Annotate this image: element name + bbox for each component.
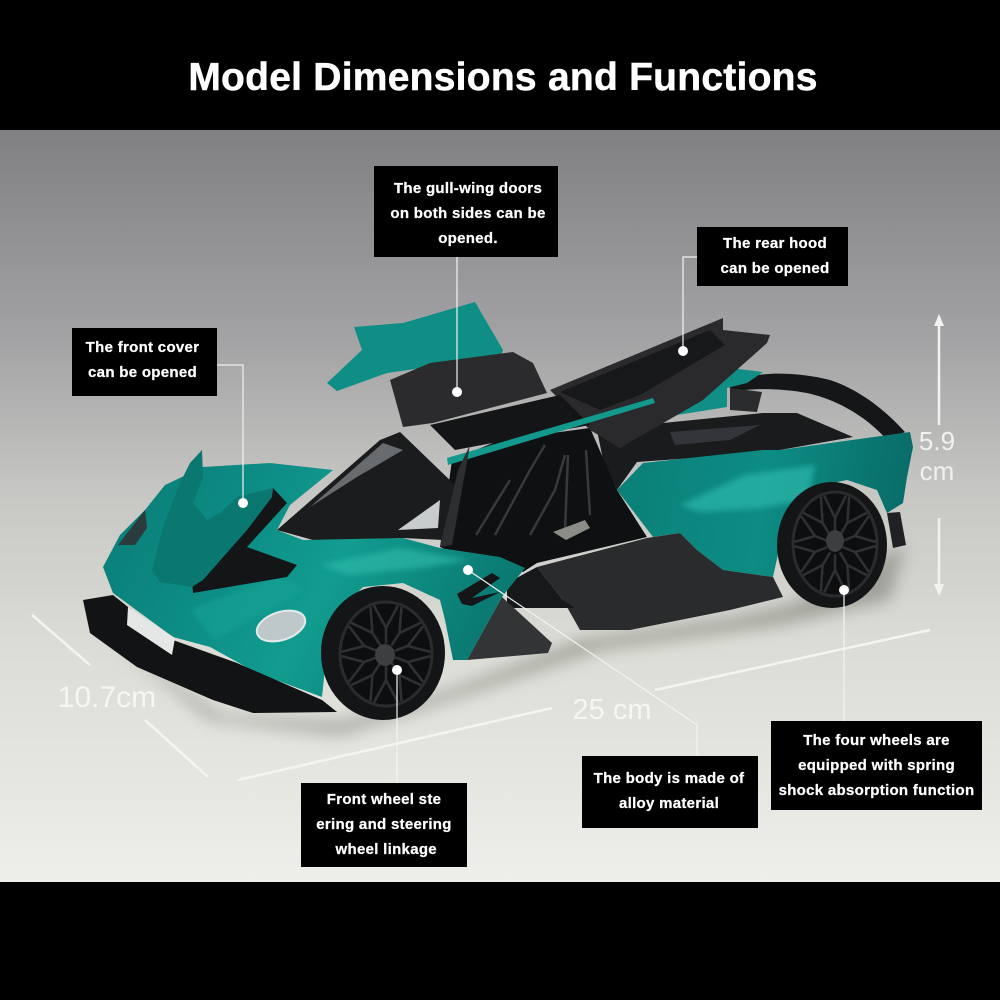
title: Model Dimensions and Functions xyxy=(188,56,818,99)
callout: front cover: The front cover xyxy=(86,339,199,356)
callout: front wheel steering: Front wheel ste xyxy=(327,791,441,808)
callout: rear hood: The rear hood xyxy=(723,235,827,252)
main front body xyxy=(103,463,525,697)
model car xyxy=(83,302,913,720)
callout leader lines xyxy=(217,257,844,783)
callout: rear hood: can be opened xyxy=(721,260,829,277)
leader dots xyxy=(238,346,849,675)
seats xyxy=(476,445,590,535)
fender highlight xyxy=(320,548,470,575)
callout: body material: alloy material xyxy=(619,795,719,812)
engine detail xyxy=(670,425,760,445)
front splitter xyxy=(83,595,337,713)
front cover open xyxy=(152,450,273,587)
headlight left xyxy=(118,510,147,545)
dimension: length 25 cm: 25 cm xyxy=(573,694,651,726)
callout: front wheel steering: ering and steering xyxy=(316,816,452,833)
callout: four wheels: The four wheels are xyxy=(803,732,950,749)
dimension: height 5.9 cm xyxy=(919,314,955,596)
front wheel xyxy=(321,586,445,720)
callout: body material: The body is made of xyxy=(594,770,744,787)
gull-wing door xyxy=(327,302,547,427)
cabin glass xyxy=(277,432,457,542)
rear hood open xyxy=(550,318,770,448)
callout: front wheel steering xyxy=(301,783,467,867)
car shadow xyxy=(95,545,905,735)
dimension: height 5.9 cm: 5.9 xyxy=(919,426,955,456)
windscreen upper glass xyxy=(310,443,403,507)
far door strip xyxy=(447,398,655,465)
dimension: length 25 cm xyxy=(238,630,930,780)
photo background xyxy=(0,130,1000,882)
small teal panel behind hood xyxy=(677,368,763,415)
interior xyxy=(440,428,647,572)
callout: gull-wing doors xyxy=(374,166,562,257)
callout: four wheels: shock absorption function xyxy=(779,782,974,799)
front wedge panel xyxy=(467,597,552,660)
callout: front wheel steering: wheel linkage xyxy=(336,841,437,858)
callout: gull-wing doors: opened. xyxy=(438,230,498,247)
callout: rear hood xyxy=(697,227,853,286)
headlight right xyxy=(253,605,309,647)
rear pillar block xyxy=(730,388,762,412)
rear diffuser xyxy=(887,512,906,548)
callout: gull-wing doors: on both sides can be xyxy=(390,205,546,222)
under sill xyxy=(507,567,575,608)
rear body side xyxy=(617,432,913,577)
cabin reflection xyxy=(398,500,440,530)
engine bay xyxy=(597,413,853,490)
callout: body material xyxy=(582,756,756,828)
front intake xyxy=(192,488,297,593)
seat floor tag xyxy=(553,520,590,540)
rear wing arch xyxy=(730,374,905,440)
callout: gull-wing doors: The gull-wing doors xyxy=(394,180,542,197)
dimension: width 10.7cm xyxy=(32,615,208,777)
fender vent xyxy=(457,573,500,606)
number plate xyxy=(127,607,175,655)
rear body highlight xyxy=(680,465,815,512)
callout: four wheels: equipped with spring xyxy=(798,757,955,774)
dimension: height 5.9 cm: cm xyxy=(920,456,954,486)
side matte panel xyxy=(537,533,783,630)
callout: front cover: can be opened xyxy=(88,364,197,381)
callout: front cover xyxy=(72,328,213,396)
rear wheel xyxy=(777,482,887,608)
cabin pillar xyxy=(440,445,470,547)
nose highlight xyxy=(190,575,305,640)
callout: four wheels xyxy=(771,721,982,810)
dimension: width 10.7cm: 10.7cm xyxy=(58,681,156,714)
door hinge cluster xyxy=(430,395,590,450)
